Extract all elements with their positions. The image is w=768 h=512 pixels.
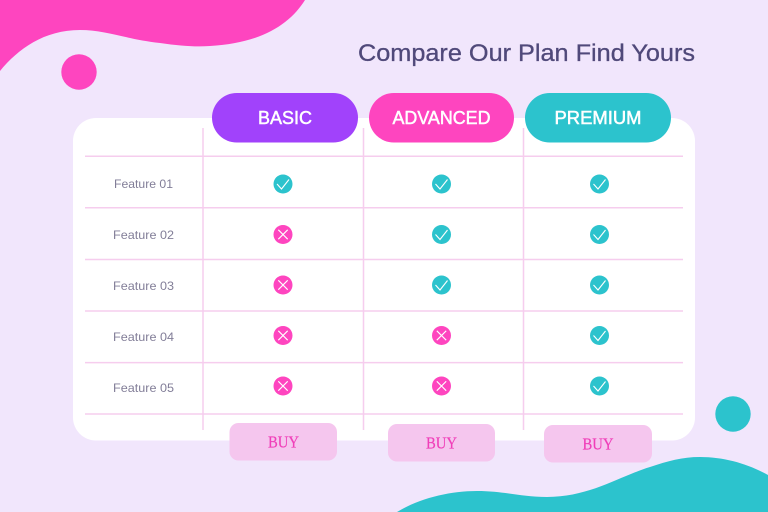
row labels: Feature 01 xyxy=(114,177,173,191)
title: Compare Our Plan Find Yours xyxy=(358,40,695,67)
row labels: Feature 05 xyxy=(113,381,174,395)
column icons: advanced xyxy=(432,174,451,396)
teal decorative circle xyxy=(715,396,751,432)
button: premium buy: BUY xyxy=(582,434,614,454)
row labels xyxy=(113,177,174,395)
header: advanced: ADVANCED xyxy=(392,107,490,128)
button: advanced buy: BUY xyxy=(426,434,457,452)
button: basic buy xyxy=(230,423,337,460)
teal blob bottom-right xyxy=(397,457,768,512)
column icons: basic xyxy=(274,174,292,396)
header: basic: BASIC xyxy=(258,107,312,128)
column icons: premium xyxy=(590,174,609,396)
button: advanced buy xyxy=(388,424,495,462)
row labels: Feature 04 xyxy=(113,330,174,344)
pink decorative circle xyxy=(61,54,97,90)
pink blob top-left xyxy=(0,0,305,71)
header: premium xyxy=(525,93,671,142)
header: advanced xyxy=(369,93,514,142)
row labels: Feature 03 xyxy=(113,279,174,293)
header: basic xyxy=(212,93,358,142)
panel: comparison table xyxy=(73,118,695,440)
row labels: Feature 02 xyxy=(113,228,174,242)
header: premium: PREMIUM xyxy=(554,107,642,128)
button: premium buy xyxy=(544,425,652,462)
button: basic buy: BUY xyxy=(268,432,299,452)
